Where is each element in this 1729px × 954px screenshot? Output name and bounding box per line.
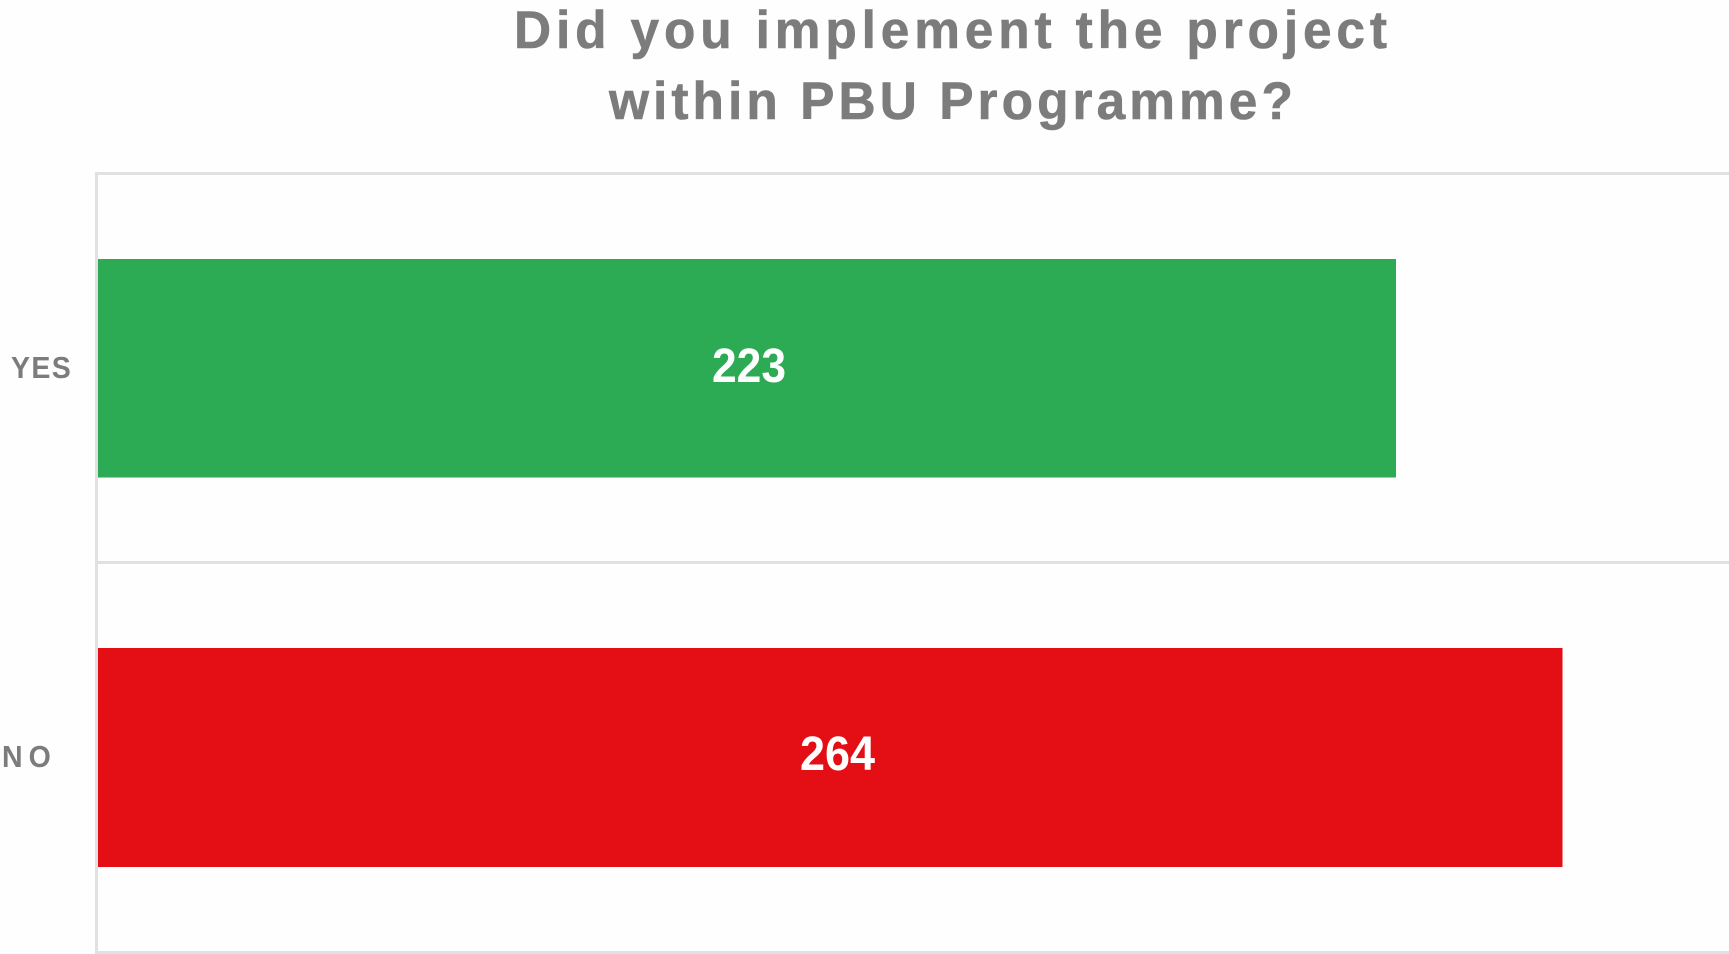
title xyxy=(514,1,1387,131)
bar: NO xyxy=(98,648,1562,867)
category label: YES: YES xyxy=(11,351,71,385)
category label: NO: NO xyxy=(2,740,51,774)
title: Did you implement the project xyxy=(514,1,1387,60)
value label: 264: 264 xyxy=(800,728,875,781)
bar: YES xyxy=(98,259,1396,478)
title: within PBU Programme? xyxy=(608,72,1293,131)
value label: 223: 223 xyxy=(712,340,786,393)
chart frame and gridlines xyxy=(95,172,1729,954)
